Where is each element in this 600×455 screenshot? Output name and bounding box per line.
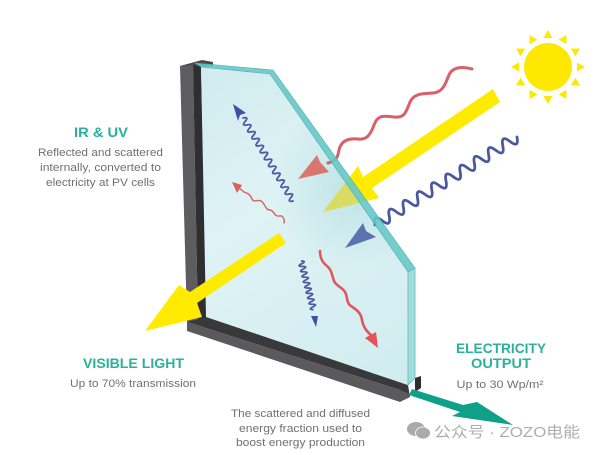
text block: scattered energy note: energy fraction used to	[239, 423, 362, 435]
text block: IR and UV	[38, 124, 163, 189]
arrow: incoming blue ultraviolet wave	[345, 137, 517, 248]
text block: scattered energy note	[231, 408, 370, 449]
text block: IR and UV: electricity at PV cells	[46, 177, 156, 189]
arrow: scattered blue wave up-left	[233, 104, 293, 201]
text block: IR and UV: IR & UV	[74, 124, 129, 140]
arrow: incoming visible light	[323, 89, 500, 212]
text block: electricity output	[456, 340, 547, 391]
text block: visible light: VISIBLE LIGHT	[83, 355, 184, 371]
text block: scattered energy note: The scattered and diffused	[231, 408, 370, 420]
frame: window frame	[180, 60, 421, 402]
arrow: scattered red wave downward	[320, 251, 378, 348]
text block: electricity output: ELECTRICITY	[456, 340, 547, 356]
arrow: scattered red wave up-left	[232, 182, 284, 223]
arrow: electricity output	[409, 389, 513, 425]
text block: electricity output: OUTPUT	[471, 355, 531, 371]
text block: scattered energy note: boost energy production	[236, 437, 365, 449]
arrow: incoming red infrared wave	[298, 68, 472, 179]
text block: electricity output: Up to 30 Wp/m²	[456, 379, 544, 391]
watermark text: 公众号 · ZOZO电能	[434, 424, 580, 441]
arrow: scattered blue wave downward	[299, 261, 318, 327]
text block: IR and UV: Reflected and scattered	[38, 147, 163, 159]
panel: glass pane	[201, 67, 408, 385]
text block: visible light: Up to 70% transmission	[70, 378, 196, 390]
text block: IR and UV: internally, converted to	[40, 162, 161, 174]
text block: visible light	[70, 355, 196, 390]
icon: sun	[511, 30, 585, 104]
glass edge	[195, 63, 415, 385]
icon: chat watermark	[407, 422, 430, 439]
arrow: transmitted visible light	[145, 233, 286, 331]
